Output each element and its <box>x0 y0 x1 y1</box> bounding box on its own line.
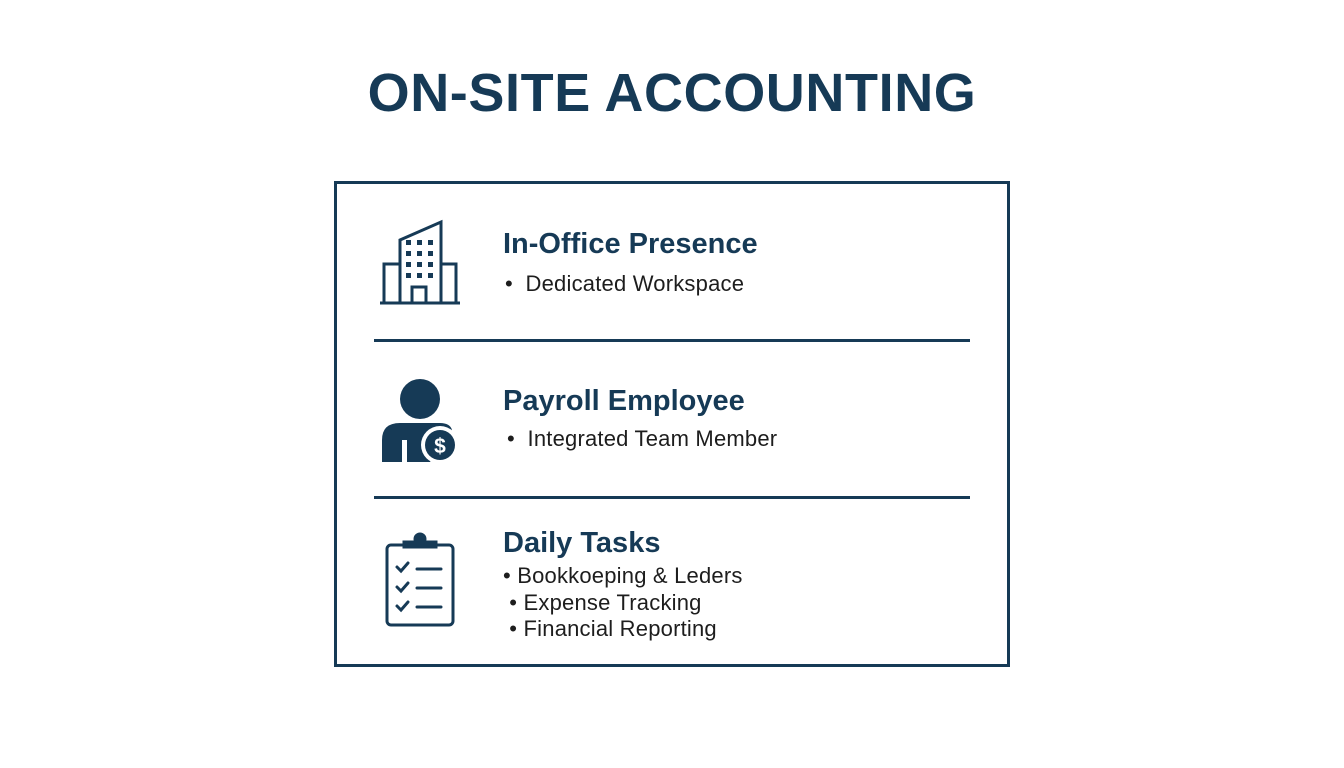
text: daily tasks bullets <box>503 563 743 641</box>
icon: clipboard <box>387 534 453 625</box>
text: daily tasks bullets: • Bookkoeping & Leders <box>503 563 743 588</box>
heading: daily tasks: Daily Tasks <box>503 527 660 559</box>
icon: person with dollar: $ <box>434 435 446 458</box>
heading: payroll employee: Payroll Employee <box>503 385 745 417</box>
title: ON-SITE ACCOUNTING <box>368 63 976 123</box>
icon: building <box>380 222 460 303</box>
text: daily tasks bullets: • Financial Reporting <box>509 616 717 641</box>
heading: in-office presence: In-Office Presence <box>503 228 758 260</box>
text: daily tasks bullets: • Expense Tracking <box>509 590 702 614</box>
text: in-office bullets: • Dedicated Workspace <box>505 271 744 296</box>
panel: main box <box>334 181 1010 667</box>
text: payroll bullets: • Integrated Team Member <box>507 426 777 451</box>
icon: person with dollar <box>382 379 459 464</box>
